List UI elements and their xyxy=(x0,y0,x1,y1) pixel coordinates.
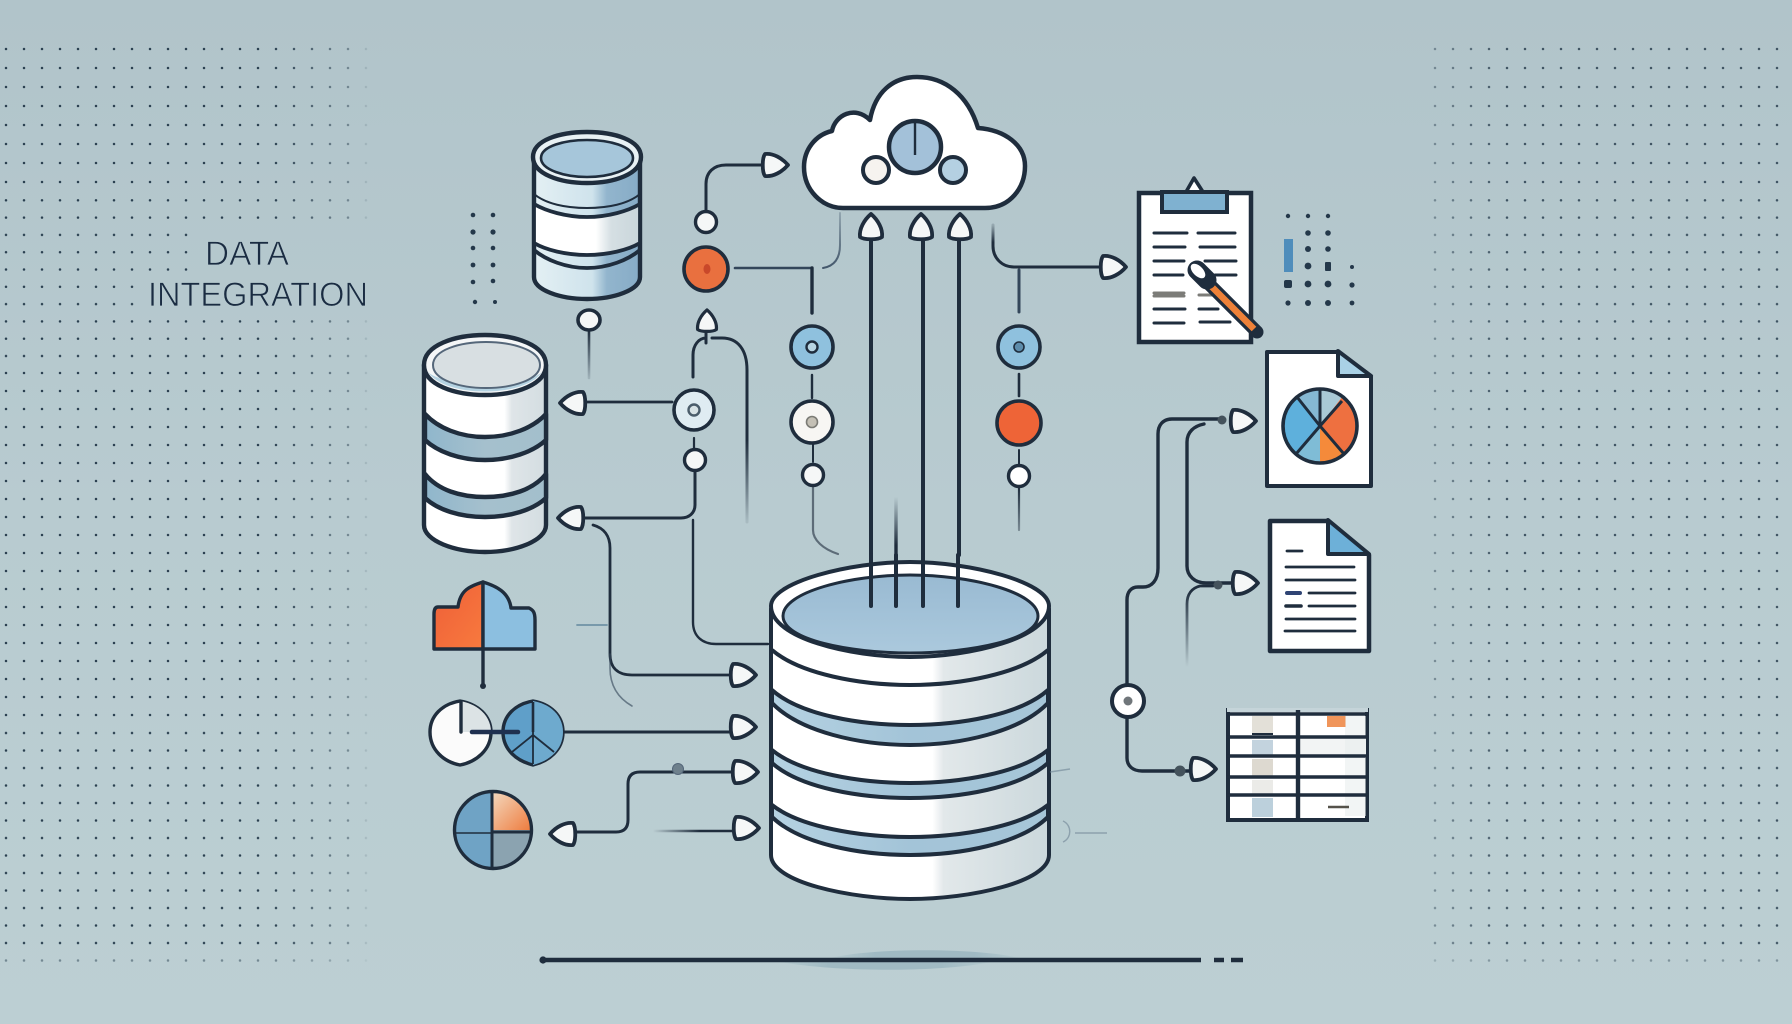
bottom baseline with shadow xyxy=(539,950,1243,970)
pie chart document xyxy=(1267,351,1371,486)
title: DATA xyxy=(205,235,289,273)
pen xyxy=(1207,282,1257,332)
main database xyxy=(771,562,1049,899)
clock icon blue xyxy=(472,701,563,765)
small database xyxy=(533,132,641,299)
dots and bar right of clipboard xyxy=(1284,214,1355,306)
connectors: upper left network xyxy=(577,165,840,706)
medium database xyxy=(424,335,546,552)
pie chart icon xyxy=(454,791,532,869)
node circles xyxy=(674,212,1144,717)
arrow pins xyxy=(550,154,1258,845)
faint marks right of main database xyxy=(1050,769,1107,842)
clock icon white xyxy=(430,701,491,765)
dots: left of small cylinder xyxy=(470,213,497,304)
connectors: vertical lines from cloud into main database xyxy=(871,240,959,555)
pins under cloud xyxy=(860,214,971,239)
title xyxy=(148,235,368,314)
connectors: into main database xyxy=(563,732,735,832)
text document xyxy=(1270,520,1369,651)
cloud icon xyxy=(804,77,1025,208)
connectors: upper right network xyxy=(993,225,1105,530)
clipboard icon xyxy=(1139,178,1257,342)
left cloud icon red and blue xyxy=(434,582,535,689)
node on connector xyxy=(672,764,684,774)
main database inner stubs xyxy=(871,555,958,606)
connectors: right side documents xyxy=(1127,419,1233,771)
title: INTEGRATION xyxy=(148,276,368,314)
table icon xyxy=(1227,708,1368,820)
